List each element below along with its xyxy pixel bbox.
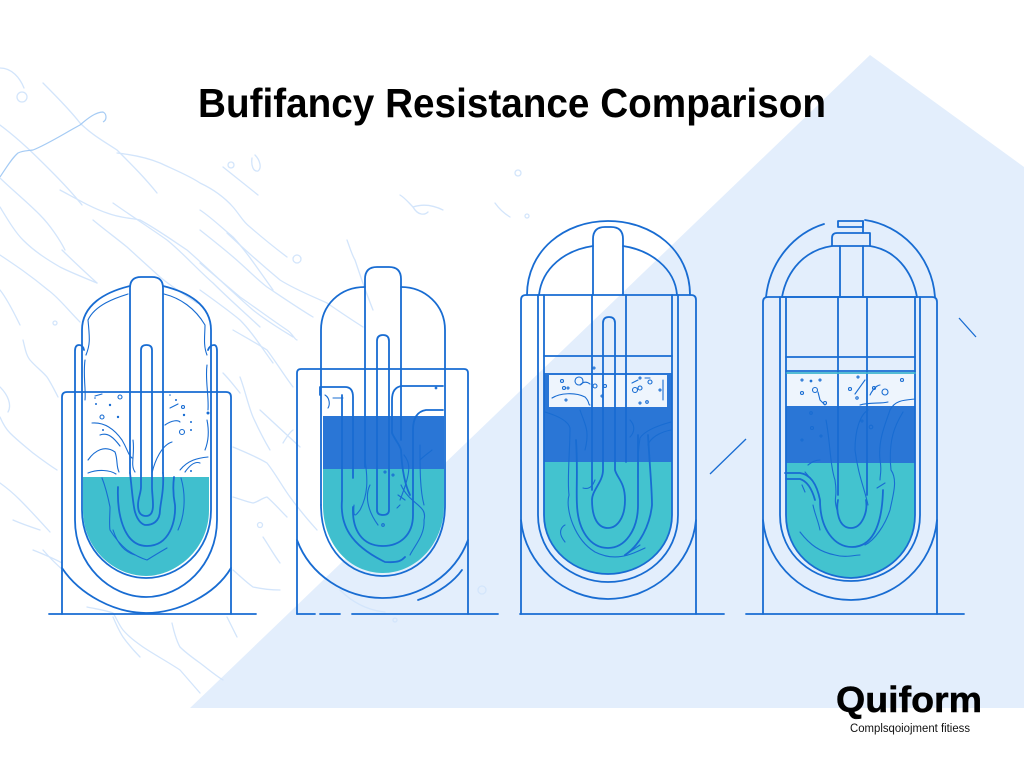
vessel 1 liquid — [83, 477, 209, 576]
vessel 3 dark liquid — [544, 373, 672, 462]
tick mark right of vessel 4 — [959, 318, 976, 337]
vessel 4 swirls and bubbles — [787, 373, 915, 556]
vessel 2 lower liquid — [323, 469, 444, 573]
title: Bufifancy Resistance Comparison — [198, 80, 826, 126]
vessel 2 outlines — [297, 267, 498, 614]
background water streaks — [0, 68, 529, 693]
vessel 3 foam window — [549, 375, 667, 407]
vessel 3 lower liquid — [544, 462, 672, 574]
vessel 1 outlines — [49, 277, 256, 614]
vessel 1 swirls and bubbles — [84, 294, 210, 560]
vessel 2 — [297, 267, 498, 614]
vessel 4 — [746, 220, 964, 614]
vessel 3 — [520, 221, 724, 614]
vessel 4 dark liquid — [786, 406, 915, 463]
logo wordmark: Quiform — [836, 679, 982, 720]
vessel 4 foam window — [786, 374, 915, 406]
vessel 2 swirls — [325, 387, 437, 555]
vessel 4 outlines — [746, 220, 964, 614]
vessel 1 — [49, 277, 256, 614]
vessel 4 lower liquid — [786, 463, 915, 578]
strong water line — [0, 112, 106, 177]
vessel 3 outlines — [520, 221, 724, 614]
tick mark left of vessel 4 — [710, 439, 746, 474]
logo tagline: Complsqoiojment fitiess — [850, 723, 970, 735]
vessel 2 dark liquid — [323, 416, 444, 469]
vessel 3 swirls and bubbles — [545, 367, 671, 557]
background triangle panel — [190, 55, 1024, 708]
